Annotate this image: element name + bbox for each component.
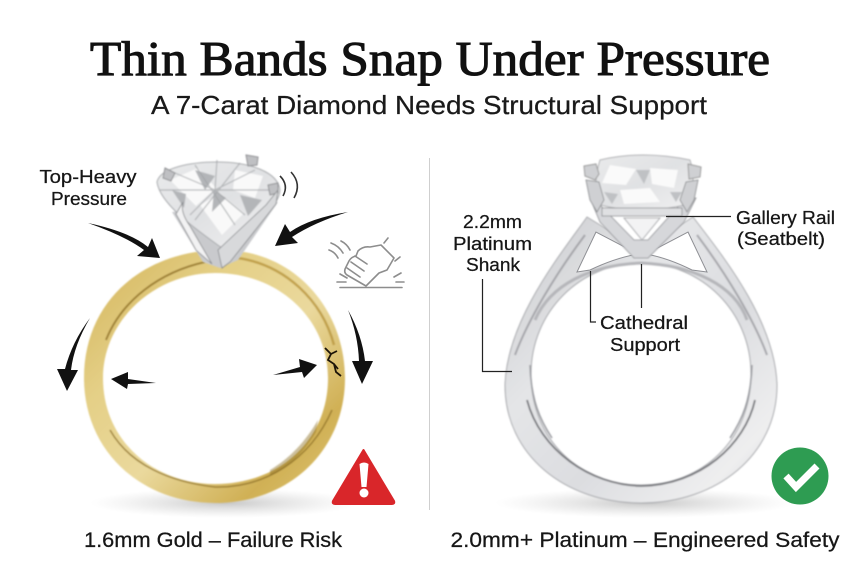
arrow: pressure left	[88, 223, 160, 258]
label: top-heavy pressure: Pressure	[51, 189, 127, 209]
arrow: outward left	[57, 318, 90, 391]
icon: warning triangle	[333, 450, 394, 504]
icon: green check badge	[772, 448, 828, 504]
wobble marks	[280, 172, 297, 198]
arrow: inward right	[273, 359, 317, 378]
title: Thin Bands Snap Under Pressure	[90, 31, 770, 86]
arrow: outward right	[348, 310, 373, 384]
gold ring band	[84, 250, 345, 503]
gold ring setting and diamond	[157, 155, 280, 268]
platinum ring band	[505, 217, 777, 503]
platinum setting and diamond	[584, 155, 701, 258]
platinum cathedral gaps	[577, 232, 707, 272]
ring shadow	[90, 488, 360, 518]
label: cathedral support: Cathedral	[600, 313, 688, 333]
centre divider	[428, 158, 430, 510]
label: cathedral support	[590, 264, 688, 355]
label: gallery rail: Gallery Rail	[736, 208, 835, 228]
label: platinum shank: Shank	[466, 255, 521, 275]
icon: fist impact	[329, 238, 404, 288]
label: top-heavy pressure	[40, 167, 136, 209]
caption: platinum: 2.0mm+ Platinum – Engineered Safety	[450, 529, 840, 552]
panel: gold ring failure	[40, 155, 404, 552]
subtitle: A 7-Carat Diamond Needs Structural Support	[151, 90, 708, 120]
ring shadow	[495, 488, 795, 518]
label: platinum shank: 2.2mm	[463, 212, 522, 232]
label: platinum shank: Platinum	[453, 234, 532, 254]
label: gallery rail	[666, 208, 835, 249]
panel: platinum ring safety	[450, 155, 840, 552]
label: platinum shank	[453, 212, 532, 372]
arrow: inward left	[111, 372, 156, 389]
label: top-heavy pressure: Top-Heavy	[40, 167, 136, 187]
crack in band	[325, 348, 341, 376]
caption: gold: 1.6mm Gold – Failure Risk	[84, 529, 343, 552]
label: cathedral support: Support	[610, 335, 680, 355]
label: gallery rail: (Seatbelt)	[737, 229, 825, 249]
arrow: pressure right	[275, 212, 348, 246]
